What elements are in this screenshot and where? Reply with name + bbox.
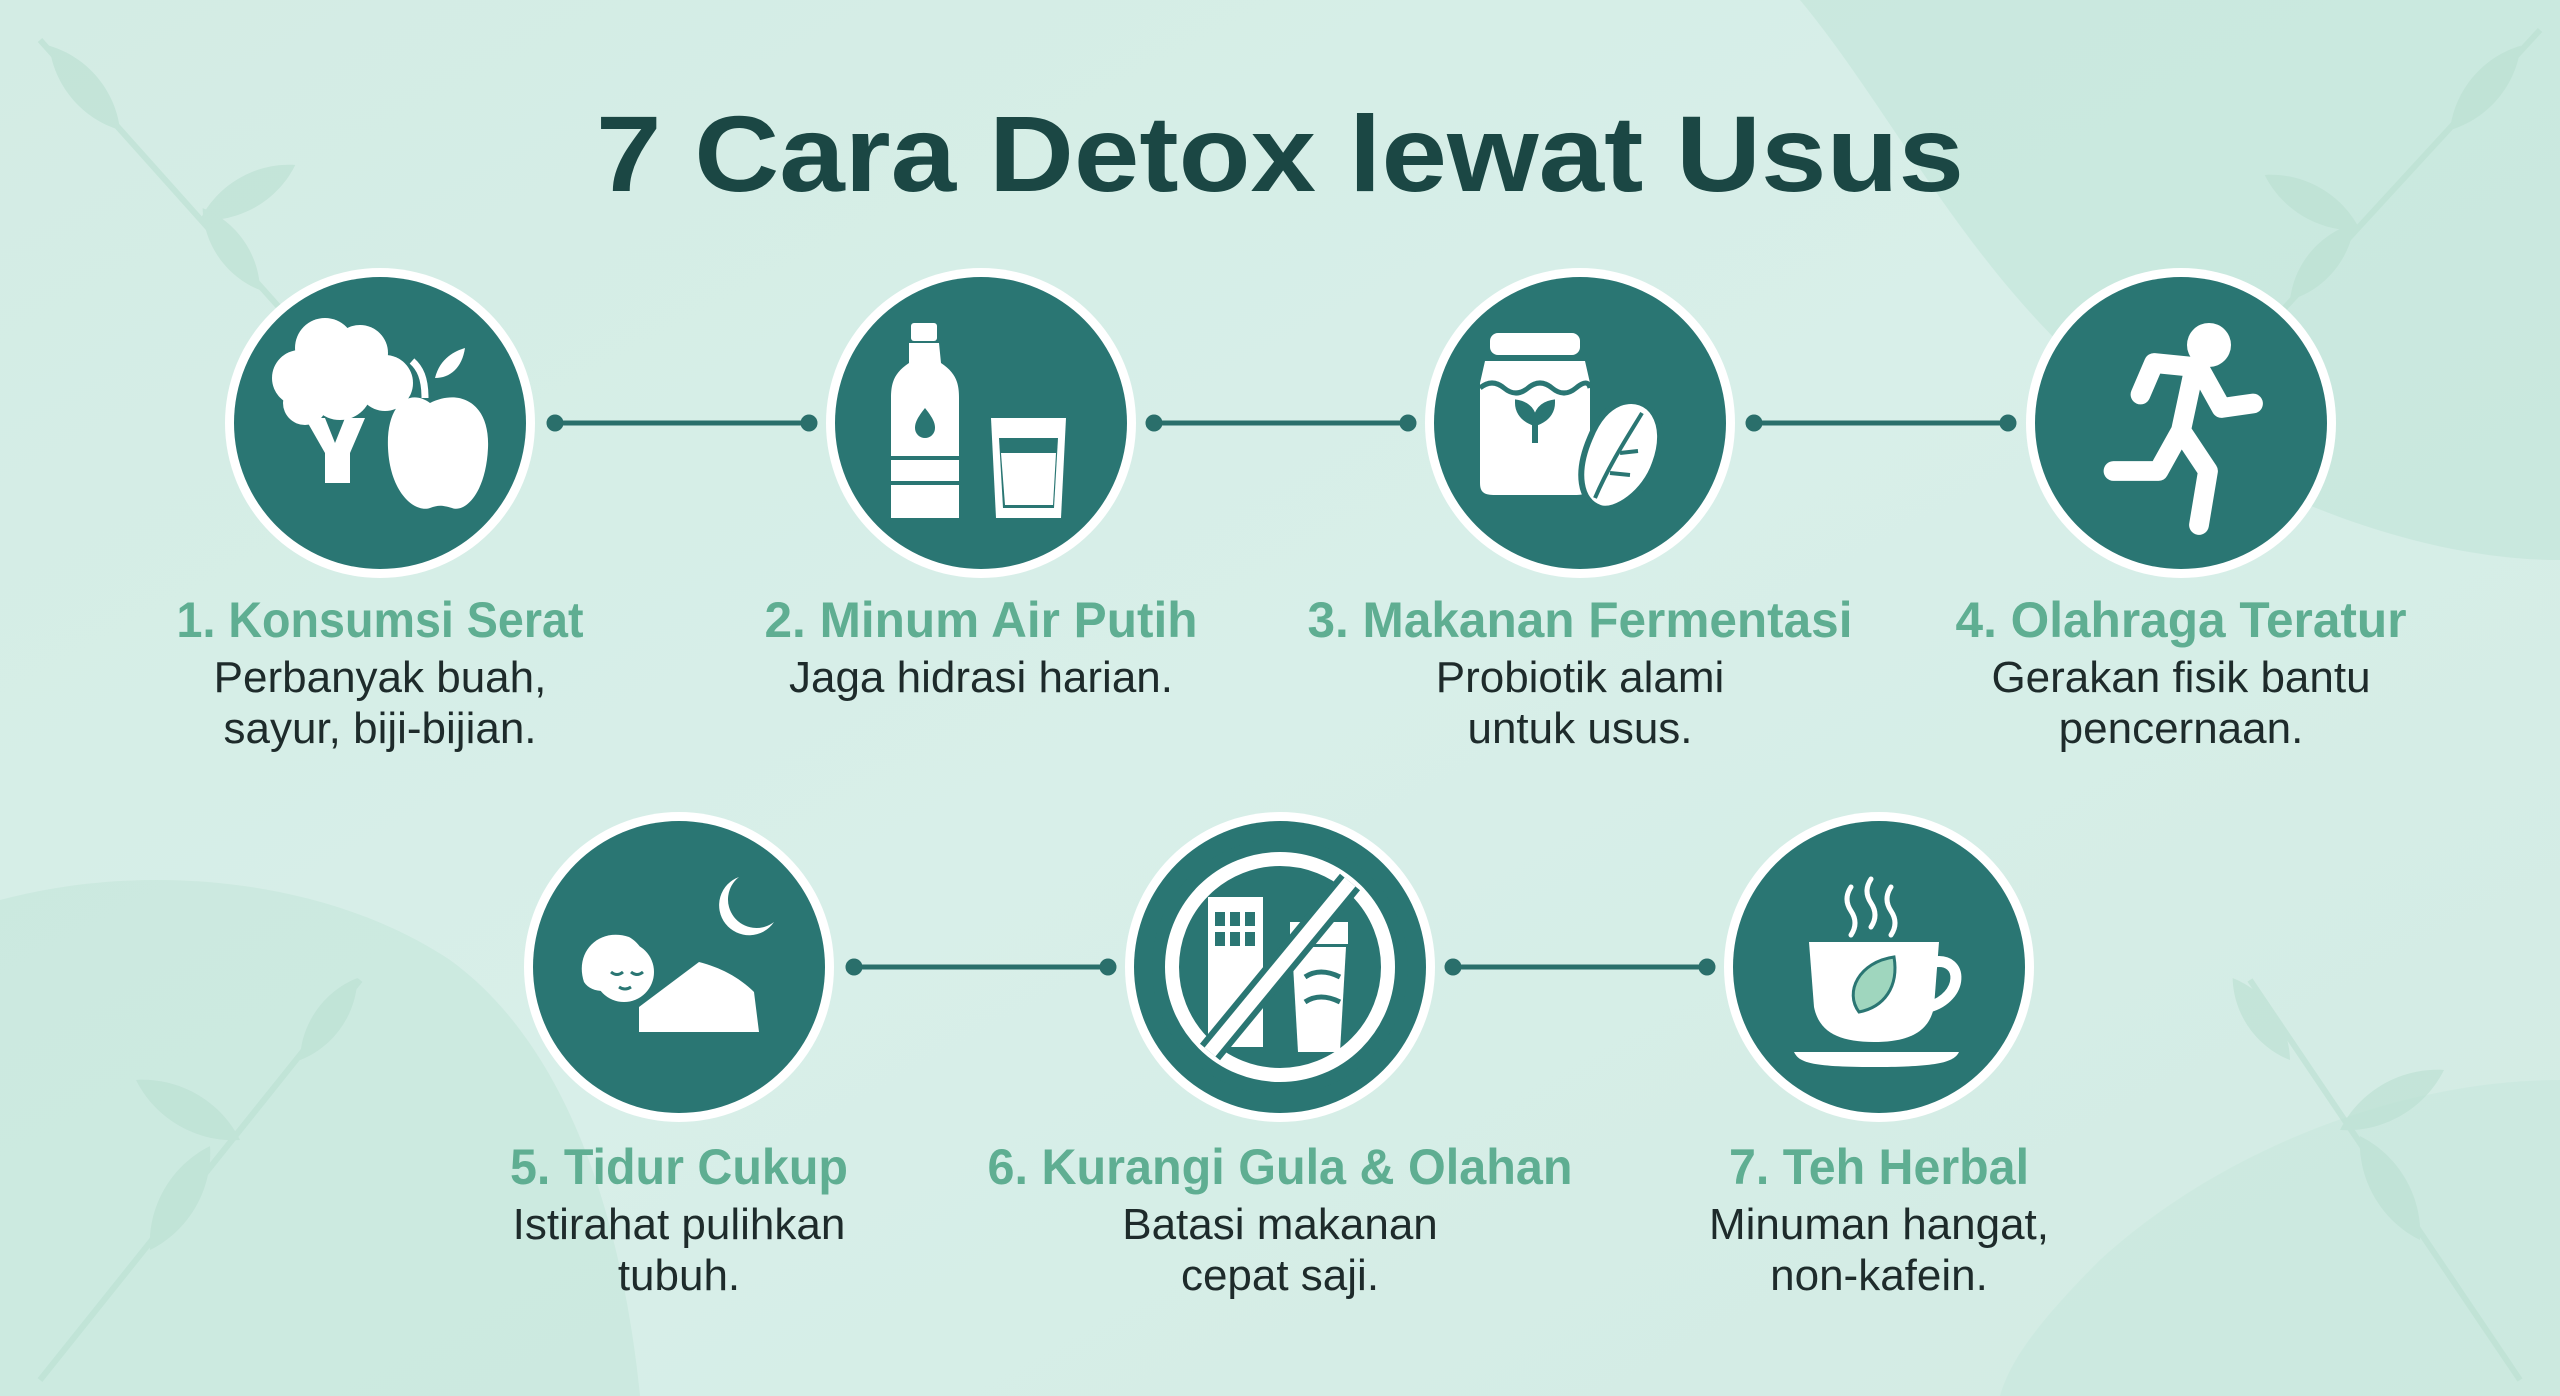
label 1 <box>176 592 584 753</box>
label 5 <box>510 1139 848 1300</box>
icon: herbal tea cup <box>1724 812 2034 1122</box>
label 3: Probiotik alami <box>1436 653 1724 702</box>
label 6: Batasi makanan <box>1122 1200 1438 1249</box>
label 3 <box>1308 592 1852 753</box>
label 7: Minuman hangat, <box>1709 1200 2049 1249</box>
connector 6-7 <box>1445 959 1715 975</box>
label 5: tubuh. <box>618 1251 740 1300</box>
label 1: Perbanyak buah, <box>214 653 546 702</box>
label 2: 2. Minum Air Putih <box>764 592 1198 648</box>
connector 1-2 <box>547 415 817 431</box>
label 1: 1. Konsumsi Serat <box>176 592 584 648</box>
label 5: 5. Tidur Cukup <box>510 1139 848 1195</box>
label 2 <box>764 592 1198 702</box>
label 6: cepat saji. <box>1181 1251 1379 1300</box>
label 2: Jaga hidrasi harian. <box>789 653 1173 702</box>
label 4 <box>1956 592 2406 753</box>
label 6 <box>988 1139 1572 1300</box>
connector 3-4 <box>1746 415 2016 431</box>
icon: water bottle and glass <box>826 268 1136 578</box>
icon: fermented jar and cabbage <box>1425 268 1735 578</box>
connector 2-3 <box>1146 415 1416 431</box>
label 3: 3. Makanan Fermentasi <box>1308 592 1852 648</box>
label 6: 6. Kurangi Gula & Olahan <box>988 1139 1572 1195</box>
label 7: 7. Teh Herbal <box>1729 1139 2029 1195</box>
label 7: non-kafein. <box>1770 1251 1988 1300</box>
icon: sleeping person with moon <box>524 812 834 1122</box>
label 3: untuk usus. <box>1467 704 1693 753</box>
connector 5-6 <box>846 959 1116 975</box>
icon: broccoli and apple <box>225 268 535 578</box>
label 4: pencernaan. <box>2059 704 2303 753</box>
icon: runner <box>2026 268 2336 578</box>
icon: no sugar / junk food <box>1125 812 1435 1122</box>
label 1: sayur, biji-bijian. <box>223 704 537 753</box>
title: 7 Cara Detox lewat Usus <box>596 93 1964 214</box>
label 4: Gerakan fisik bantu <box>1991 653 2371 702</box>
label 7 <box>1709 1139 2049 1300</box>
label 5: Istirahat pulihkan <box>513 1200 845 1249</box>
label 4: 4. Olahraga Teratur <box>1956 592 2406 648</box>
